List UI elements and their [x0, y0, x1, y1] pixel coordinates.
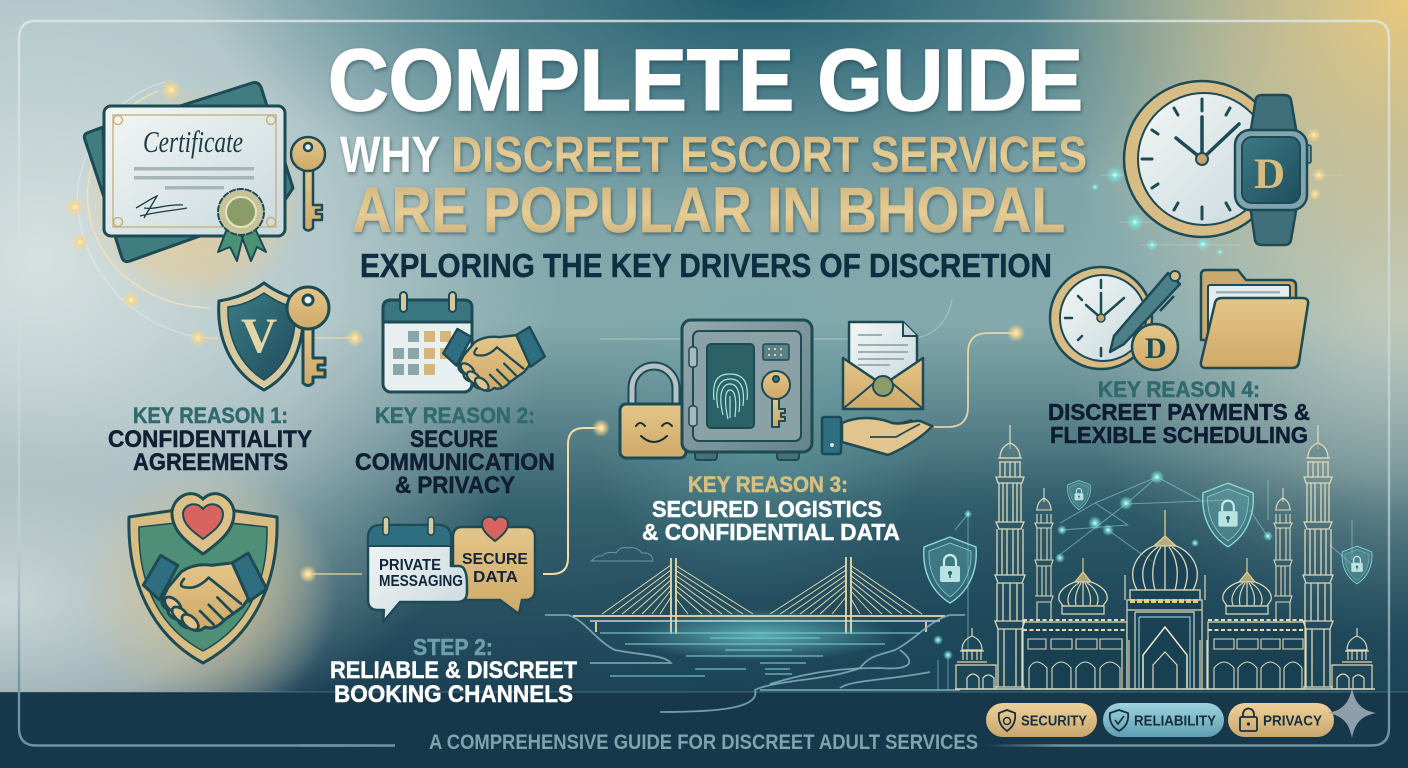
gold key [291, 137, 325, 230]
central dome [1130, 510, 1200, 600]
label: key reason 2: SECURE [410, 426, 498, 453]
icon: small clock with pen and coin: D [1145, 332, 1167, 365]
label: step 2: BOOKING CHANNELS [334, 681, 573, 708]
icon: sparkle watermark [1328, 688, 1376, 738]
calendar bubble [368, 525, 467, 622]
label: step 2: RELIABLE & DISCREET [330, 657, 577, 684]
cloud [590, 548, 653, 561]
icon: wall clock and smartwatch: D [1254, 151, 1285, 198]
ribbon seal [218, 189, 266, 261]
title [328, 32, 1087, 284]
keypad [763, 344, 789, 360]
label: step 2 [330, 634, 577, 708]
wing windows and arches [1028, 639, 1303, 689]
gold bubble [453, 527, 535, 614]
badge: security: SECURITY [1021, 712, 1087, 730]
icon: chat bubbles: DATA [473, 569, 518, 586]
badge: privacy: PRIVACY [1263, 712, 1322, 730]
network lines and shields [924, 470, 1372, 690]
fingerprint screen [707, 344, 754, 428]
icon: handshake shield [129, 494, 277, 663]
footer tagline: A COMPREHENSIVE GUIDE FOR DISCREET ADULT SERVICES [429, 731, 978, 754]
connector: bubbles to key reason 3 [543, 419, 610, 574]
icon: V shield with key [219, 283, 329, 390]
title line 2: WHY DISCREET ESCORT SERVICES [340, 126, 1087, 183]
label: key reason 2: & PRIVACY [395, 472, 515, 499]
heart badge [172, 494, 234, 554]
connector glow arcs around certificate [65, 79, 305, 337]
label: key reason 2 [355, 403, 555, 499]
signature [136, 196, 187, 218]
icon: small clock with pen and coin [1050, 267, 1180, 370]
label: key reason 4: KEY REASON 4: [1098, 377, 1260, 402]
water lines [600, 633, 920, 676]
bridge and river [545, 548, 965, 712]
V letter: V [241, 307, 277, 363]
icon: calendar with handshake [383, 292, 545, 393]
label: key reason 1: CONFIDENTIALITY [108, 426, 312, 453]
connector: handshake shield to bubbles [299, 565, 362, 583]
certificate lines [134, 167, 254, 190]
connector: key reason 3 to key reason 4 [600, 300, 1025, 427]
label: key reason 1: AGREEMENTS [133, 449, 288, 476]
connector: shield to key reason 2 [189, 329, 364, 347]
side pavilions [956, 628, 1372, 689]
icon: envelope with document [843, 322, 923, 409]
label: step 2: STEP 2: [413, 634, 493, 660]
side domes [1059, 558, 1107, 614]
label: key reason 3: & CONFIDENTIAL DATA [642, 519, 900, 545]
towers [596, 557, 926, 634]
label: key reason 4: FLEXIBLE SCHEDULING [1050, 422, 1308, 448]
title line 1: COMPLETE GUIDE [328, 32, 1083, 129]
deck [573, 615, 945, 617]
bubble text: PRIVATE [379, 557, 441, 574]
sparkles [1091, 128, 1342, 256]
icon: chat bubbles: MESSAGING [379, 573, 463, 590]
icon: certificate with key [84, 82, 325, 262]
network nodes [933, 470, 1273, 660]
badge: reliability: RELIABILITY [1134, 712, 1216, 730]
icon: open hand [822, 417, 932, 455]
label: key reason 3 [642, 472, 900, 545]
badge: security [986, 703, 1097, 737]
badge: privacy [1228, 703, 1334, 737]
label: key reason 2: COMMUNICATION [355, 449, 555, 476]
icon: chat bubbles [368, 517, 535, 622]
label: key reason 1: KEY REASON 1: [133, 403, 288, 428]
cables [602, 565, 922, 614]
icon: wall clock and smartwatch [1091, 81, 1342, 256]
subtitle: EXPLORING THE KEY DRIVERS OF DISCRETION [360, 247, 1052, 284]
icon: chat bubbles: SECURE [462, 551, 528, 568]
icon: safe with fingerprint [682, 320, 812, 460]
Taj-ul-Masajid mosque outline [955, 425, 1375, 689]
central portal [1122, 575, 1207, 689]
icon: folder [1201, 270, 1308, 368]
title line 3: ARE POPULAR IN BHOPAL [352, 174, 1065, 246]
label: key reason 2: KEY REASON 2: [375, 403, 535, 428]
minarets [995, 425, 1025, 687]
back cards [84, 82, 293, 262]
icon: padlock with smile [620, 366, 686, 458]
label: key reason 4 [1048, 377, 1310, 448]
label: key reason 3: SECURED LOGISTICS [652, 496, 882, 522]
watch [1250, 95, 1297, 245]
wings [1023, 600, 1305, 689]
badge: reliability [1103, 703, 1224, 737]
label: key reason 3: KEY REASON 3: [688, 472, 848, 497]
safe key [762, 371, 790, 427]
certificate sheet [104, 106, 285, 236]
river banks [545, 615, 965, 712]
label: key reason 1 [108, 403, 312, 476]
key [287, 287, 329, 386]
label: key reason 4: DISCREET PAYMENTS & [1048, 399, 1310, 425]
footer band [0, 692, 1408, 768]
certificate script: Certificate [143, 124, 243, 159]
